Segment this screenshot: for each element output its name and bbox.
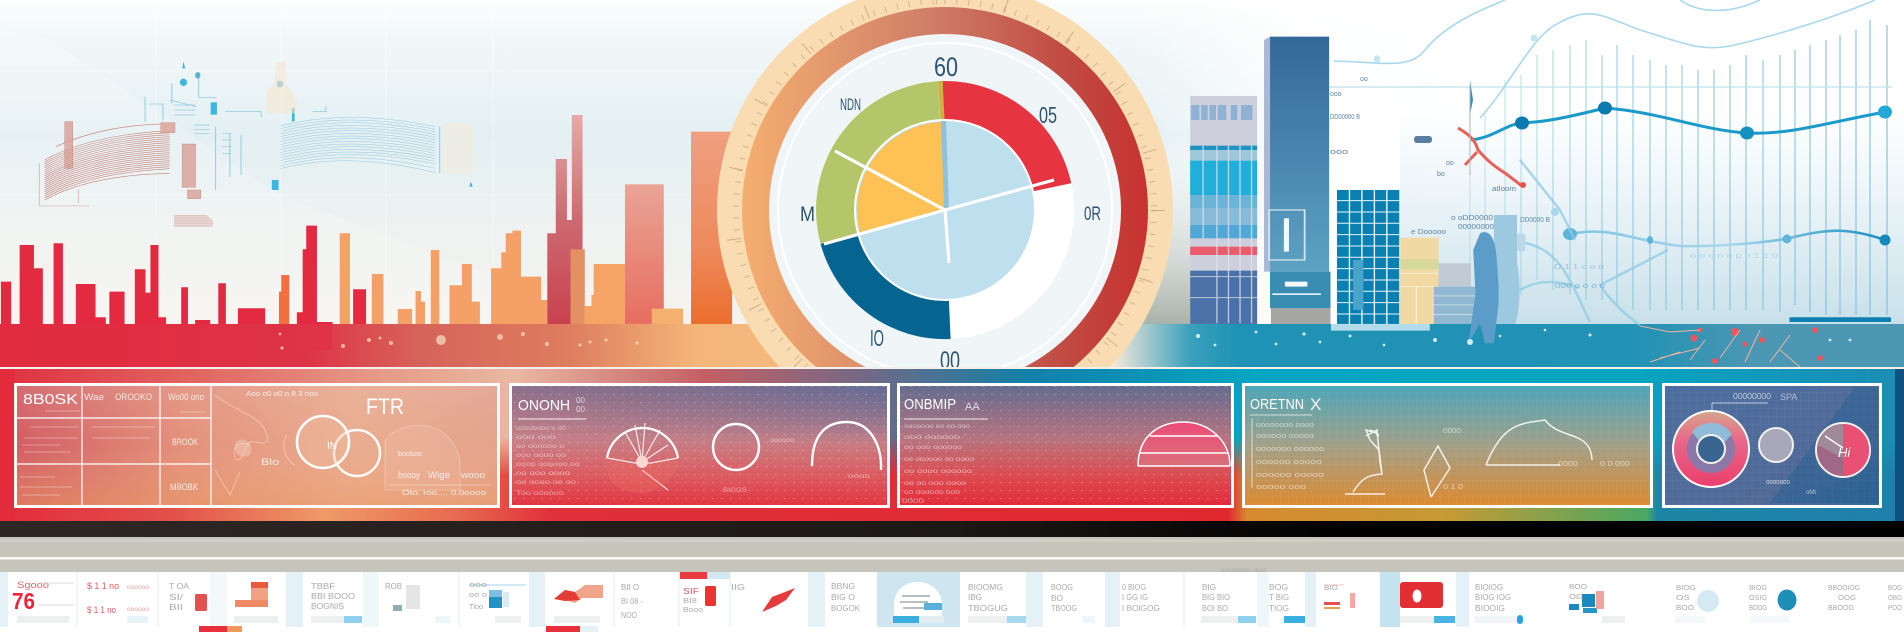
lower line markers <box>1563 228 1577 240</box>
panel 2 text rows <box>516 426 871 497</box>
ribbon speckles <box>1196 326 1851 367</box>
panel 3 text rows: oo oooooo ooo <box>904 490 961 496</box>
panel 3 text rows: 0000 <box>902 499 925 505</box>
card text: BI8 <box>683 598 697 605</box>
card text: T BIG <box>1269 592 1289 602</box>
faint sketch shapes <box>215 395 295 495</box>
panel 3 text rows: oo ooo oooooo <box>904 445 963 451</box>
panel 4 text rows: oooooo ooooo <box>1256 472 1324 479</box>
card text: BOG <box>1269 582 1288 592</box>
chart: right side vertical bars and lines <box>1290 0 1892 325</box>
panel 1 labels: Blo <box>261 457 279 467</box>
card text: BIOOIG <box>1475 603 1505 613</box>
small chart labels: DD0000 B <box>1520 217 1550 224</box>
circular gauge <box>717 0 1173 367</box>
pie chart <box>1816 423 1870 477</box>
connector curves <box>1520 160 1668 325</box>
card dividers <box>0 572 1469 627</box>
panel 2: wheel gauges: 00 <box>576 396 585 405</box>
gauge labels: 00 <box>940 347 960 375</box>
glass grid building <box>1337 190 1399 324</box>
gauge dividers <box>824 151 1054 263</box>
panel 1 labels: Oto. roo.... 0.0oooo <box>402 490 486 497</box>
card text: OOG <box>1838 595 1856 602</box>
red bars <box>1 226 366 324</box>
small chart labels: D 1 1 o o o <box>1554 264 1604 271</box>
pale foundation slab <box>1331 324 1430 331</box>
panel 2: wheel gauges <box>510 384 888 506</box>
upper line markers <box>1515 102 1892 140</box>
gauge labels: 05 <box>1039 102 1057 128</box>
dome shape <box>1138 422 1230 466</box>
buildings <box>1190 37 1891 343</box>
red tabs <box>199 572 730 632</box>
card text: 0 BIOG <box>1122 582 1146 592</box>
card text: OS <box>1676 595 1690 602</box>
panel 3 text rows: 0000 <box>1186 462 1205 468</box>
gauge labels: NDN <box>840 95 861 114</box>
bottom card row <box>0 568 1904 640</box>
small chart labels: ooo <box>1330 149 1348 156</box>
card footer bars <box>17 615 1790 624</box>
card text: BIOG IOG <box>1475 592 1511 602</box>
outer peach ring <box>717 0 1173 367</box>
panel 4 text rows: 0000 <box>1443 428 1461 435</box>
gauge face <box>769 34 1121 386</box>
card 1 metric: 76 <box>12 588 35 614</box>
panel 4 heading: ORETNN <box>1250 396 1304 413</box>
panel 5 labels: ooooooo <box>1766 479 1790 486</box>
card text <box>169 568 1902 620</box>
ring ticks <box>733 0 1157 367</box>
card text: BOO <box>1676 605 1695 612</box>
panel 2 text rows: ooo ooo <box>516 435 557 441</box>
lower ribbon background <box>0 369 1904 521</box>
card 2 values: $ 1 1 no <box>87 581 119 591</box>
panel 2 text rows: oooo <box>848 474 871 480</box>
card text: OG <box>1569 594 1583 601</box>
striped office building <box>1190 96 1257 324</box>
yellow inner sector <box>857 122 945 233</box>
mini red bars <box>1324 585 1355 609</box>
panel 4 text rows: ooooooo oooooo <box>1256 446 1324 453</box>
card text: BIOOMG <box>968 582 1003 592</box>
card text: I GG IG <box>1122 592 1148 602</box>
red curved data sheet <box>39 122 213 226</box>
panel 3: dome chart <box>898 384 1232 506</box>
panel 2 text rows: oo oooo oo oo <box>516 480 577 486</box>
card text: BIG BIO <box>1202 592 1230 602</box>
card 2 values: oooooo <box>127 585 150 591</box>
page background <box>0 0 1904 324</box>
small chart labels: atloom <box>1492 186 1516 193</box>
small chart labels: o oDD0000 <box>1451 215 1493 222</box>
small chart labels: 000 o o o o <box>1555 283 1605 290</box>
card text: BIOIOG <box>1475 582 1503 592</box>
panel 5 heading: OOOOOOOO <box>1733 392 1771 401</box>
card text: BII <box>169 602 183 612</box>
panel 4 text rows: 0 1 0 <box>1443 484 1463 491</box>
card text: SIF <box>683 586 699 596</box>
card text: SI/ <box>169 592 184 602</box>
small chart labels: 00000000 <box>1458 224 1494 231</box>
gauge labels: IO <box>870 325 884 351</box>
card text: BIO <box>1324 585 1339 592</box>
card text: TBBF <box>311 581 335 591</box>
panel 5: donut and pies: oMt <box>1806 490 1816 496</box>
inner pale blue disc <box>855 120 1035 300</box>
card text: IIG <box>731 582 745 592</box>
panel 1: table and circles <box>16 384 498 506</box>
card text: BBNG <box>831 581 855 591</box>
card text: OBG <box>1888 595 1902 602</box>
panel 4 text rows: 0 0 000 <box>1600 461 1630 468</box>
panel 4 text rows: oooooo ooooo <box>1256 433 1314 440</box>
illustration: faint city line drawing <box>39 60 473 226</box>
orange bars <box>340 231 547 324</box>
panel 5: donut and pies: SPA <box>1780 392 1797 402</box>
red sector <box>942 81 1072 192</box>
panel 2 text rows: oo oooooo o <box>516 444 565 450</box>
card 1 metric: Sgooo <box>17 580 49 590</box>
card text: TBOOG <box>1051 603 1077 613</box>
green sector <box>816 81 945 244</box>
panel 4 text rows: ooooo ooo <box>1256 484 1306 491</box>
panel 5: donut and pies <box>1664 384 1880 506</box>
panel 1 labels: wooo <box>460 470 485 480</box>
vertical bars <box>1470 20 1887 315</box>
panel 2: wheel gauges: 00 <box>576 405 585 414</box>
panel 4 text rows: 0000 <box>1558 461 1578 468</box>
panel 4 text rows <box>1256 422 1630 491</box>
panel 3 heading: ONBMIP <box>904 396 956 413</box>
card text: TIOG <box>1269 603 1289 613</box>
panel 1 labels: MBOBK <box>170 482 198 492</box>
card text: BOG <box>1888 585 1902 592</box>
panel 1 heading: 8B0SK <box>23 391 78 408</box>
grey circle <box>1759 428 1793 462</box>
card text: BIOG <box>1676 585 1696 592</box>
gradient ring <box>742 7 1148 367</box>
panel 2 text rows: ooo oooo oo <box>516 453 567 459</box>
card text: BOI BO <box>1202 603 1228 613</box>
panel 1 labels: boooy <box>398 470 420 480</box>
panel 2 text rows: oooo oooooo oo <box>516 462 581 468</box>
card text: BOGOK <box>831 603 860 613</box>
card text: OSIG <box>1749 595 1767 602</box>
panel 1 labels: BROOK <box>172 437 198 447</box>
top curves <box>1334 0 1875 118</box>
card text: BOO <box>1569 584 1588 591</box>
tall blue tower <box>1264 37 1331 324</box>
card text: Booo <box>683 607 703 614</box>
arc gauge <box>812 422 881 470</box>
outline sketches <box>1345 420 1592 497</box>
small chart labels: o o o n o p o 1 1 0 <box>1690 253 1778 260</box>
card text: BO <box>1051 593 1063 603</box>
panel 1 labels: OROOKO <box>115 392 152 402</box>
card text: NOO <box>621 610 637 620</box>
panel 1: table and circles: IN <box>327 441 337 452</box>
card text: BOOG <box>1749 605 1767 612</box>
panel 3 text rows: ooooooo oo oo ooo <box>904 424 971 430</box>
white remainder sector <box>940 112 1074 339</box>
panel 2 text rows: oooooo <box>770 438 795 444</box>
upper blue line <box>1471 108 1885 140</box>
card text: I BOIGOG <box>1122 603 1160 613</box>
panel 3: dome chart: AA <box>965 401 980 413</box>
card text: BI 08 - <box>621 596 643 606</box>
gauge labels: 60 <box>934 52 958 82</box>
small chart labels <box>1330 76 1778 290</box>
panel 1 labels: Wo00 ono <box>168 392 204 402</box>
card text: T OA <box>169 581 189 591</box>
panel 2 text rows: oo ooo oooo <box>516 471 571 477</box>
card text: ooo <box>469 582 487 589</box>
small chart labels: e Dooooo <box>1411 229 1446 236</box>
small chart labels: DD00000 B <box>1330 114 1360 121</box>
panel 4 text rows: oooooo ooooo <box>1256 459 1322 466</box>
tall salmon tower <box>547 115 583 324</box>
card text: TBOGUG <box>968 603 1008 613</box>
dark floating bar <box>1789 317 1891 322</box>
card text: BOOG <box>1051 582 1073 592</box>
panel 2 heading: ONONH <box>518 397 570 414</box>
card text: IBG <box>968 592 982 602</box>
card 2 values: oooooo <box>127 607 150 613</box>
small chart labels: ooo <box>1330 91 1342 98</box>
gauge labels <box>800 52 1101 375</box>
wheel icon <box>606 423 678 494</box>
panel 3 text rows: ooo oooooo <box>904 435 961 441</box>
panel 1 title: FTR <box>366 394 404 419</box>
blue sector <box>820 236 951 340</box>
panel 2 text rows: Too oooooo <box>516 491 565 497</box>
card text: Tloo <box>469 604 483 611</box>
card icons red <box>195 582 795 612</box>
card text: BBOOIOG <box>1828 585 1860 592</box>
dome icon <box>894 582 942 623</box>
small chart labels: oo <box>1446 160 1454 167</box>
panel 3 text rows: oo oo ooo oooo <box>904 481 967 487</box>
panel 2 text rows: oooooooo o o0 <box>516 426 567 432</box>
panel 1 labels: Aoo o0 o0 n 8 3 noo <box>246 391 318 398</box>
gauge labels: M <box>800 203 815 226</box>
blue curved data sheet <box>145 74 440 190</box>
panel 3 text rows: oo oooooo oo oooo <box>904 457 975 463</box>
pale orange spire <box>267 60 297 113</box>
card text: ooooooo ooo <box>1220 568 1267 574</box>
donut chart <box>1673 411 1749 487</box>
card 2 values: $ 1 1 no <box>87 605 116 615</box>
card text: BIOG <box>1749 585 1767 592</box>
yellow building <box>1400 238 1439 324</box>
panel 5: donut and pies: Hi <box>1838 445 1851 460</box>
dark bar <box>0 521 1904 537</box>
figures <box>1469 215 1525 343</box>
red branch <box>1458 128 1522 186</box>
lower blue line <box>1570 231 1885 246</box>
panel 1 labels <box>84 391 486 497</box>
gauge labels: 0R <box>1084 204 1101 225</box>
card text: BBOOG <box>1828 605 1854 612</box>
panel 4: line sketches: X <box>1310 395 1321 414</box>
panel 1 labels: Wige <box>428 470 450 480</box>
card text: BII O <box>621 582 639 592</box>
card 2 values <box>87 581 150 615</box>
panel 3 text rows: oo oooo oooooo <box>904 469 973 475</box>
table text lines <box>20 411 490 495</box>
red tile with drop <box>1400 582 1443 608</box>
panel 1 labels: bookoo <box>398 451 422 458</box>
blue icons <box>393 585 1604 613</box>
card text: POO <box>1888 605 1902 612</box>
table grid <box>17 386 211 505</box>
circle outline <box>713 424 759 470</box>
blue drops and tabs <box>180 62 473 190</box>
card text: BBI BOOO <box>311 591 355 601</box>
overlapping circles <box>334 430 380 476</box>
colour ribbon under skyline <box>0 324 1904 367</box>
small chart labels: oo <box>1360 76 1368 83</box>
panel 4: line sketches <box>1244 384 1652 506</box>
panel 2 text rows: BIGGS <box>723 488 747 494</box>
card text: BIG <box>1202 582 1216 592</box>
grey bar <box>0 537 1904 572</box>
card text: ROB <box>385 581 402 591</box>
card text: BOGNIS <box>311 601 344 611</box>
card 1 metric <box>12 580 74 614</box>
bar chart: city skyline bars <box>1 115 732 324</box>
panel 3 text rows <box>902 424 1205 505</box>
drops <box>1697 590 1719 612</box>
card text: oo o <box>469 592 487 599</box>
small chart labels: bo <box>1437 171 1445 178</box>
pale stepped blocks <box>1434 263 1475 324</box>
panel 4 text rows: oooooooo oooo <box>1256 422 1314 429</box>
panel 1 labels: Wae <box>84 392 104 402</box>
white divider <box>0 367 1904 369</box>
card text: BIG O <box>831 592 855 602</box>
